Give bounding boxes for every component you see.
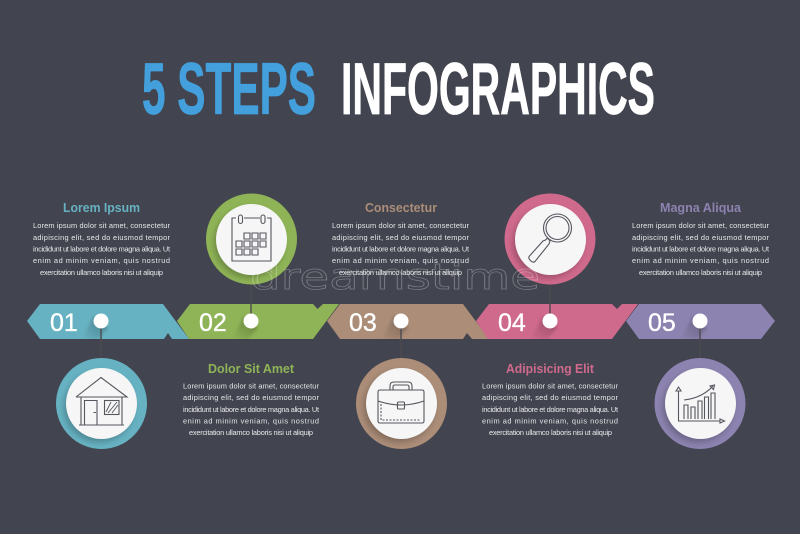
step 4 arrow — [476, 304, 638, 339]
text block: Magna Aliqua: Lorem ipsum dolor sit amet, consectetur — [632, 221, 770, 230]
title: 5 STEPS — [142, 49, 316, 130]
step 1 arrow — [27, 304, 189, 339]
text block: Lorem Ipsum — [33, 201, 171, 277]
title — [142, 49, 655, 130]
text block: Consectetur: adipiscing elit, sed do eiusmod tempor — [332, 233, 470, 242]
step 5 arrow — [626, 304, 775, 339]
text block: Dolor Sit Amet: Dolor Sit Amet — [208, 362, 295, 376]
text block: Magna Aliqua: exercitation ullamco laboris nisi ut aliquip — [639, 268, 762, 277]
circle 2 with calendar icon — [206, 194, 297, 284]
icon: briefcase — [378, 382, 424, 423]
text block: Consectetur: exercitation ullamco laboris nisi ut aliquip — [339, 268, 462, 277]
watermark: dreamstime — [250, 257, 540, 298]
text block: Adipisicing Elit: incididunt ut labore et dolore magna aliqua. Ut — [482, 405, 618, 414]
text block: Lorem Ipsum: Lorem ipsum dolor sit amet, consectetur — [33, 221, 171, 230]
text block: Dolor Sit Amet — [183, 362, 320, 437]
text block: Dolor Sit Amet: incididunt ut labore et dolore magna aliqua. Ut — [183, 405, 319, 414]
text block: Dolor Sit Amet: Lorem ipsum dolor sit amet, consectetur — [183, 382, 320, 390]
text block: Dolor Sit Amet: exercitation ullamco laboris nisi ut aliquip — [189, 428, 313, 437]
text block: Adipisicing Elit: Adipisicing Elit — [506, 362, 595, 376]
text block: Lorem Ipsum: Lorem Ipsum — [63, 201, 140, 215]
text block: Lorem Ipsum: enim ad minim veniam, quis nostrud — [33, 256, 170, 265]
timeline dots — [94, 314, 708, 328]
text block: Consectetur — [332, 201, 470, 277]
text block: Consectetur: incididunt ut labore et dolore magna aliqua. Ut — [332, 244, 469, 254]
text block: Adipisicing Elit — [482, 362, 619, 437]
step 3 arrow: 03 — [349, 309, 377, 337]
text block: Magna Aliqua: Magna Aliqua — [660, 201, 742, 215]
connector lines — [101, 282, 700, 360]
icon: growth chart — [676, 385, 724, 423]
circle 1 with house icon — [56, 358, 147, 449]
text block: Lorem Ipsum: incididunt ut labore et dolore magna aliqua. Ut — [33, 244, 170, 254]
circle 3 with briefcase icon — [356, 358, 447, 449]
text block: Dolor Sit Amet: enim ad minim veniam, quis nostrud — [183, 416, 319, 426]
step 2 arrow: 02 — [199, 309, 227, 337]
text block: Consectetur: Consectetur — [365, 201, 437, 215]
step 3 arrow — [327, 304, 489, 339]
text block: Adipisicing Elit: Lorem ipsum dolor sit amet, consectetur — [482, 382, 619, 390]
text block: Lorem Ipsum: adipiscing elit, sed do eiusmod tempor — [33, 233, 171, 242]
step 1 arrow: 01 — [50, 309, 78, 337]
step 4 arrow: 04 — [498, 309, 526, 337]
text block: Adipisicing Elit: adipiscing elit, sed do eiusmod tempor — [482, 393, 619, 402]
step 2 arrow — [177, 304, 339, 339]
icon: calendar — [232, 215, 271, 261]
text block: Magna Aliqua: adipiscing elit, sed do eiusmod tempor — [632, 233, 770, 242]
text block: Consectetur: Lorem ipsum dolor sit amet, consectetur — [332, 221, 470, 230]
text block: Adipisicing Elit: exercitation ullamco laboris nisi ut aliquip — [489, 428, 612, 437]
icon: house — [76, 378, 127, 425]
circle 4 with magnifier icon — [504, 194, 596, 284]
text block: Dolor Sit Amet: adipiscing elit, sed do eiusmod tempor — [183, 393, 320, 402]
text block: Magna Aliqua: incididunt ut labore et dolore magna aliqua. Ut — [632, 244, 769, 254]
circle 5 with chart icon — [654, 358, 746, 449]
text block: Magna Aliqua — [632, 201, 770, 277]
step 5 arrow: 05 — [648, 309, 676, 337]
text block: Lorem Ipsum: exercitation ullamco laboris nisi ut aliquip — [40, 268, 163, 277]
text block: Magna Aliqua: enim ad minim veniam, quis nostrud — [632, 256, 769, 265]
text block: Consectetur: enim ad minim veniam, quis nostrud — [332, 256, 469, 265]
text block: Adipisicing Elit: enim ad minim veniam, quis nostrud — [482, 416, 618, 426]
icon: magnifying glass — [529, 214, 572, 262]
